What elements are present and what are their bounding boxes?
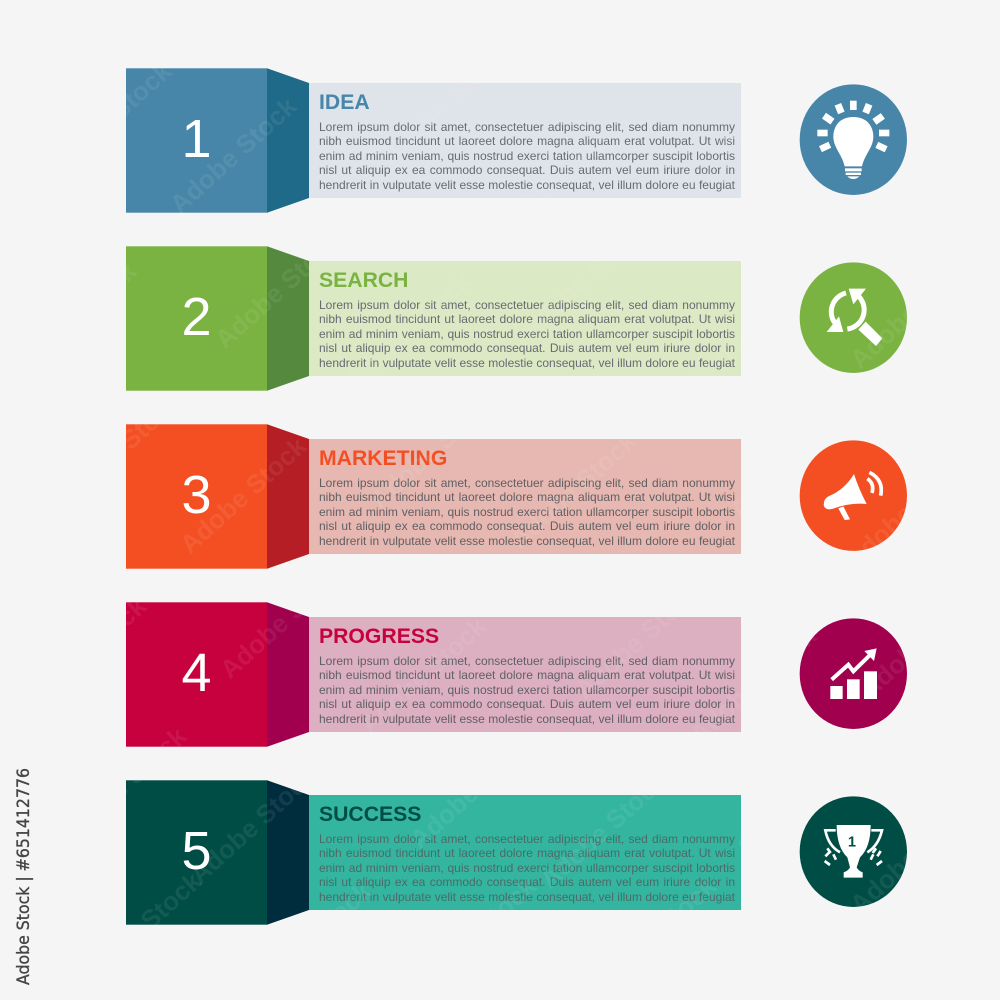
body text: nisl ut aliquip ex ea commodo consequat. Duis autem vel eum iriure dolor in (319, 163, 735, 177)
number 1: 1 (181, 109, 212, 169)
step 5: success (126, 780, 741, 925)
step 2: search (126, 246, 741, 391)
body text: nisl ut aliquip ex ea commodo consequat. Duis autem vel eum iriure dolor in (319, 341, 735, 355)
watermark overlay: Adobe Stock (404, 725, 543, 854)
watermark overlay: Adobe Stock (669, 275, 808, 404)
watermark overlay: Adobe Stock (174, 430, 313, 559)
number 3: 3 (181, 465, 212, 525)
body text: Lorem ipsum dolor sit amet, consectetuer adipiscing elit, sed diam nonummy (319, 476, 735, 490)
watermark overlay: Adobe Stock (584, 870, 723, 999)
heading: success: SUCCESS (319, 803, 421, 826)
watermark overlay: Adobe Stock (829, 115, 968, 244)
step 1: idea (126, 68, 741, 213)
body text: nibh euismod tincidunt ut laoreet dolore magna aliquam erat volutpat. Ut wisi (319, 668, 735, 682)
watermark overlay: Adobe Stock (404, 870, 543, 999)
number 4: 4 (181, 643, 212, 703)
body text: nisl ut aliquip ex ea commodo consequat. Duis autem vel eum iriure dolor in (319, 697, 735, 711)
body text: nibh euismod tincidunt ut laoreet dolore magna aliquam erat volutpat. Ut wisi (319, 490, 735, 504)
watermark overlay: Adobe Stock (354, 610, 493, 739)
3D block and text band (126, 424, 741, 569)
watermark overlay: Adobe Stock (844, 245, 983, 374)
body text: nibh euismod tincidunt ut laoreet dolore magna aliquam erat volutpat. Ut wisi (319, 846, 735, 860)
body text (319, 476, 735, 548)
watermark overlay: Adobe Stock (499, 105, 638, 234)
body text: Lorem ipsum dolor sit amet, consectetuer adipiscing elit, sed diam nonummy (319, 832, 735, 846)
body text (319, 654, 735, 726)
watermark overlay: Adobe Stock (39, 55, 178, 184)
body text: hendrerit in vulputate velit esse molestie consequat, vel illum dolore eu feugiat (319, 356, 735, 370)
body text (319, 832, 735, 904)
watermark overlay: Adobe Stock (854, 575, 993, 704)
watermark overlay: Adobe Stock (69, 865, 208, 994)
icon: light bulb (800, 84, 907, 195)
watermark overlay: Adobe Stock (14, 590, 153, 719)
watermark overlay: Adobe Stock (54, 720, 193, 849)
icon: megaphone (800, 440, 907, 551)
icon: rising bar chart (800, 618, 907, 729)
3D block and text band (126, 68, 741, 213)
body text: nibh euismod tincidunt ut laoreet dolore magna aliquam erat volutpat. Ut wisi (319, 312, 735, 326)
watermark overlay: Adobe Stock (4, 255, 143, 384)
body text: enim ad minim veniam, quis nostrud exerci tation ullamcorper suscipit lobortis (319, 861, 735, 875)
icon: trophy (800, 796, 907, 907)
step 4: progress (126, 602, 741, 747)
body text: hendrerit in vulputate velit esse molestie consequat, vel illum dolore eu feugiat (319, 890, 735, 904)
number 5: 5 (181, 821, 212, 881)
body text: hendrerit in vulputate velit esse molestie consequat, vel illum dolore eu feugiat (319, 534, 735, 548)
heading: idea: IDEA (319, 91, 370, 114)
watermark overlay: Adobe Stock (684, 620, 823, 749)
body text: hendrerit in vulputate velit esse molestie consequat, vel illum dolore eu feugiat (319, 178, 735, 192)
watermark overlay: Adobe Stock (839, 445, 978, 574)
body text: nibh euismod tincidunt ut laoreet dolore magna aliquam erat volutpat. Ut wisi (319, 134, 735, 148)
watermark overlay: Adobe Stock (339, 265, 478, 394)
watermark overlay: Adobe Stock (364, 385, 503, 514)
icon: trophy: 1 (848, 834, 856, 850)
watermark overlay: Adobe Stock (569, 575, 708, 704)
watermark overlay: Adobe Stock (844, 790, 983, 919)
heading: search: SEARCH (319, 269, 408, 292)
body text: hendrerit in vulputate velit esse molestie consequat, vel illum dolore eu feugiat (319, 712, 735, 726)
body text: nisl ut aliquip ex ea commodo consequat. Duis autem vel eum iriure dolor in (319, 875, 735, 889)
watermark overlay: Adobe Stock (504, 425, 643, 554)
watermark overlay: Adobe Stock (724, 395, 863, 524)
body text: enim ad minim veniam, quis nostrud exerci tation ullamcorper suscipit lobortis (319, 505, 735, 519)
watermark overlay: Adobe Stock (374, 40, 513, 169)
watermark overlay: Adobe Stock (514, 215, 653, 344)
step 3: marketing (126, 424, 741, 569)
body text: Lorem ipsum dolor sit amet, consectetuer adipiscing elit, sed diam nonummy (319, 120, 735, 134)
body text: Lorem ipsum dolor sit amet, consectetuer adipiscing elit, sed diam nonummy (319, 298, 735, 312)
icon: magnifier with cycle arrows (800, 262, 907, 373)
watermark overlay: Adobe Stock (209, 225, 348, 354)
3D block and text band (126, 780, 741, 925)
body text: nisl ut aliquip ex ea commodo consequat. Duis autem vel eum iriure dolor in (319, 519, 735, 533)
heading: progress: PROGRESS (319, 625, 439, 648)
3D block and text band (126, 602, 741, 747)
body text: enim ad minim veniam, quis nostrud exerci tation ullamcorper suscipit lobortis (319, 327, 735, 341)
watermark overlay: Adobe Stock (214, 555, 353, 684)
watermark overlay: Adobe Stock (534, 765, 673, 894)
heading: marketing: MARKETING (319, 447, 447, 470)
body text: enim ad minim veniam, quis nostrud exerci tation ullamcorper suscipit lobortis (319, 149, 735, 163)
body text (319, 298, 735, 370)
watermark overlay: Adobe Stock (729, 735, 868, 864)
3D block and text band (126, 246, 741, 391)
watermark overlay: Adobe Stock (164, 90, 303, 219)
watermark overlay: Adobe Stock (184, 760, 323, 889)
watermark overlay: Adobe Stock (49, 385, 188, 514)
number 2: 2 (181, 287, 212, 347)
body text: enim ad minim veniam, quis nostrud exerci tation ullamcorper suscipit lobortis (319, 683, 735, 697)
watermark overlay: Adobe Stock (674, 65, 813, 194)
body text: Lorem ipsum dolor sit amet, consectetuer adipiscing elit, sed diam nonummy (319, 654, 735, 668)
body text (319, 120, 735, 192)
